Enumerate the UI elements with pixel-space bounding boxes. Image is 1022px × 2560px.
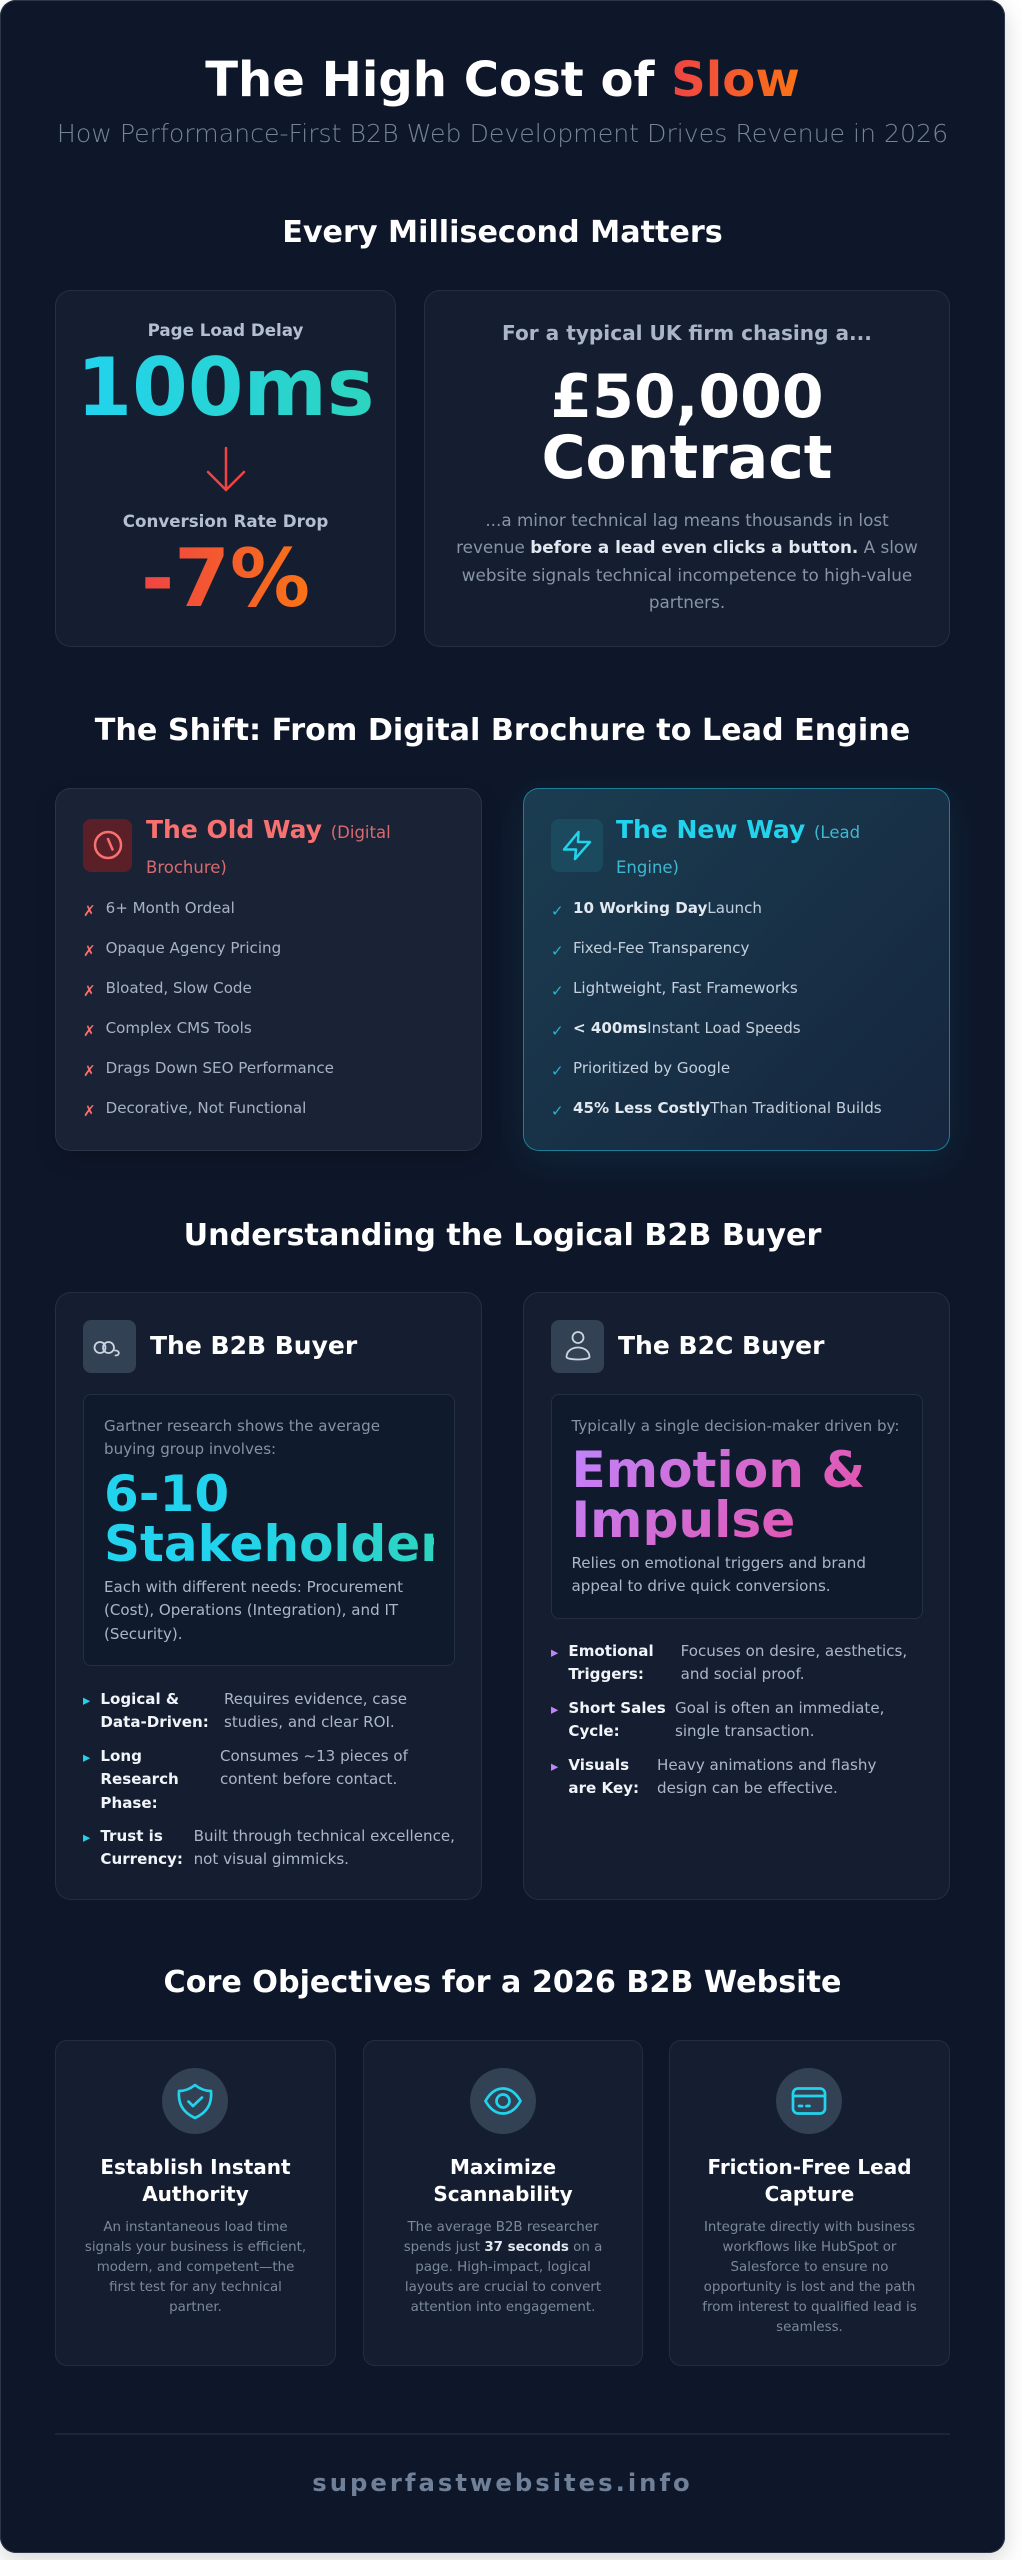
panel: friction-free lead capture: [669, 2040, 950, 2366]
heading: core objectives: Core Objectives for a 2026 B2B Website: [164, 1965, 841, 2000]
panel: contract explanation: [424, 290, 950, 647]
list: old way drawbacks: 6+ Month Ordeal: [106, 898, 235, 916]
icon: lightning bolt: [551, 819, 603, 872]
point: long research phase: ▸: [83, 1750, 90, 1766]
panel: the B2C buyer: [523, 1292, 950, 1900]
intro text: [104, 1417, 380, 1458]
card text: seamless.: [776, 2320, 843, 2335]
point: emotional triggers: ▸: [551, 1645, 558, 1661]
point: emotional triggers: Focuses on desire, aesthetics,: [681, 1642, 907, 1660]
icon: shield: [162, 2068, 228, 2134]
point: short sales cycle: Goal is often an immediate,: [675, 1699, 884, 1717]
icon: eye: [470, 2068, 536, 2134]
icon: card: [776, 2068, 842, 2134]
stat box: stakeholders: [83, 1394, 455, 1666]
point: visuals are key: design can be effective.: [657, 1779, 838, 1797]
stat box: emotion and impulse: [551, 1394, 923, 1619]
stat: contract value: [542, 362, 832, 493]
card text: spends just 37 seconds on a: [404, 2240, 602, 2255]
list: old way drawbacks: ✗: [83, 1062, 96, 1080]
list: old way drawbacks: ✗: [83, 982, 96, 1000]
point: emotional triggers: [551, 1642, 907, 1683]
supporting text: Each with different needs: Procurement: [104, 1578, 403, 1596]
explanation text: revenue before a lead even clicks a button. A slow: [456, 537, 918, 557]
point: long research phase: Long: [100, 1747, 142, 1765]
list: old way drawbacks: ✗: [83, 942, 96, 960]
card title: [433, 2154, 573, 2206]
stat: emotion and impulse: Impulse: [572, 1490, 795, 1549]
panel: establish instant authority: [55, 2040, 336, 2366]
point: short sales cycle: ▸: [551, 1702, 558, 1718]
list: old way drawbacks: Drags Down SEO Performance: [106, 1059, 334, 1077]
point: short sales cycle: single transaction.: [675, 1722, 815, 1740]
list: new way benefits: Prioritized by Google: [573, 1059, 730, 1077]
card text: modern, and competent—the: [97, 2260, 294, 2275]
point: logical and data-driven: [83, 1690, 407, 1731]
panel: page load stats: [55, 290, 396, 647]
list: new way benefits: Fixed-Fee Transparency: [573, 939, 749, 957]
panel title: The Old Way (Digital: [146, 815, 391, 844]
point: trust is currency: ▸: [83, 1830, 90, 1846]
supporting text: [104, 1578, 403, 1643]
card text: Integrate directly with business: [704, 2220, 915, 2235]
point: short sales cycle: Short Sales: [568, 1699, 666, 1717]
lead-in text: For a typical UK firm chasing a...: [502, 321, 872, 345]
heading: every millisecond matters: Every Millisecond Matters: [282, 215, 723, 250]
explanation text: website signals technical incompetence to high-value: [462, 565, 912, 585]
card text: workflows like HubSpot or: [723, 2240, 896, 2255]
panel title: The B2C Buyer: [618, 1331, 824, 1360]
card text: from interest to qualified lead is: [702, 2300, 917, 2315]
stat: emotion and impulse: [572, 1445, 902, 1545]
icon: group: [83, 1320, 136, 1373]
point: logical and data-driven: Logical &: [100, 1690, 179, 1708]
card text: The average B2B researcher: [407, 2220, 599, 2235]
heading: the shift: The Shift: From Digital Brochure to Lead Engine: [95, 713, 910, 748]
stat: emotion and impulse: Emotion &: [572, 1440, 865, 1499]
point: visuals are key: Heavy animations and flashy: [657, 1756, 876, 1774]
subtitle: How Performance-First B2B Web Development Drives Revenue in 2026: [57, 119, 948, 148]
point: short sales cycle: [551, 1699, 884, 1740]
list: new way benefits: ✓: [551, 1102, 564, 1120]
stat: 6-10 stakeholders: Stakeholders: [104, 1515, 475, 1573]
list: old way drawbacks: Complex CMS Tools: [106, 1019, 252, 1037]
icon: person: [551, 1320, 604, 1373]
card title: Establish Instant: [100, 2154, 291, 2178]
point: visuals are key: are Key:: [568, 1779, 639, 1797]
point: long research phase: Phase:: [100, 1794, 158, 1812]
icon: clock: [83, 819, 132, 872]
list: old way drawbacks: Decorative, Not Functional: [106, 1099, 306, 1117]
point: long research phase: Consumes ~13 pieces of: [220, 1747, 408, 1765]
card text: first test for any technical: [109, 2280, 282, 2295]
list: old way drawbacks: Bloated, Slow Code: [106, 979, 252, 997]
stat: 100ms: 100ms: [77, 341, 374, 434]
list: new way benefits: ✓: [551, 1062, 564, 1080]
card text: [702, 2220, 917, 2335]
label: page load delay: Page Load Delay: [148, 320, 303, 340]
point: logical and data-driven: ▸: [83, 1693, 90, 1709]
point: trust is currency: Trust is: [100, 1827, 163, 1845]
footer: website: superfastwebsites.info: [312, 2468, 693, 2497]
card text: Salesforce to ensure no: [731, 2260, 888, 2275]
intro text: buying group involves:: [104, 1440, 276, 1458]
panel: the new way: [523, 788, 950, 1151]
card text: [85, 2220, 306, 2315]
stat: 6-10 stakeholders: [104, 1469, 434, 1569]
panel: the old way: [55, 788, 482, 1151]
intro text: Gartner research shows the average: [104, 1417, 380, 1435]
card text: layouts are crucial to convert: [405, 2280, 601, 2295]
list: new way benefits: 45% Less CostlyThan Traditional Builds: [573, 1099, 882, 1117]
point: trust is currency: Currency:: [100, 1850, 183, 1868]
list: new way benefits: Lightweight, Fast Frameworks: [573, 979, 798, 997]
point: visuals are key: ▸: [551, 1759, 558, 1775]
supporting text: (Security).: [104, 1625, 183, 1643]
point: logical and data-driven: Data-Driven:: [100, 1713, 209, 1731]
title: The High Cost of: [205, 52, 654, 108]
list: old way drawbacks: Opaque Agency Pricing: [106, 939, 281, 957]
card title: Authority: [142, 2182, 249, 2206]
card text: page. High-impact, logical: [415, 2260, 591, 2275]
stat: -7%: -7%: [141, 532, 310, 625]
card title: [707, 2154, 912, 2206]
point: visuals are key: Visuals: [568, 1756, 629, 1774]
point: emotional triggers: and social proof.: [681, 1665, 805, 1683]
list: old way drawbacks: ✗: [83, 902, 96, 920]
panel title: The B2B Buyer: [150, 1331, 357, 1360]
point: emotional triggers: Triggers:: [568, 1665, 644, 1683]
panel title: Brochure): [146, 858, 227, 877]
list: new way benefits: ✓: [551, 942, 564, 960]
card title: Friction-Free Lead: [707, 2154, 912, 2178]
supporting text: appeal to drive quick conversions.: [572, 1577, 831, 1595]
card title: Maximize: [450, 2154, 556, 2178]
card text: partner.: [169, 2300, 222, 2315]
point: logical and data-driven: Requires evidence, case: [224, 1690, 407, 1708]
panel: maximize scannability: [363, 2040, 643, 2366]
icon: down arrow: [206, 446, 246, 492]
point: logical and data-driven: studies, and clear ROI.: [224, 1713, 395, 1731]
title: Slow: [671, 52, 800, 108]
panel title: [146, 815, 391, 877]
stat: 6-10 stakeholders: 6-10: [104, 1465, 229, 1523]
point: long research phase: content before contact.: [220, 1770, 397, 1788]
list: new way benefits: 10 Working DayLaunch: [573, 898, 762, 916]
list: new way benefits: [551, 898, 882, 1120]
supporting text: Relies on emotional triggers and brand: [572, 1554, 866, 1572]
point: trust is currency: [83, 1827, 455, 1868]
explanation text: partners.: [649, 592, 725, 612]
list: old way drawbacks: ✗: [83, 1022, 96, 1040]
point: short sales cycle: Cycle:: [568, 1722, 620, 1740]
supporting text: [572, 1554, 866, 1595]
list: new way benefits: ✓: [551, 902, 564, 920]
supporting text: (Cost), Operations (Integration), and IT: [104, 1601, 398, 1619]
list: new way benefits: ✓: [551, 982, 564, 1000]
panel: the B2B buyer: [55, 1292, 482, 1900]
explanation text: ...a minor technical lag means thousands in lost: [485, 510, 889, 530]
list: new way benefits: < 400msInstant Load Speeds: [573, 1019, 801, 1037]
intro text: Typically a single decision-maker driven by:: [572, 1417, 899, 1435]
card text: signals your business is efficient,: [85, 2240, 306, 2255]
card text: [404, 2220, 602, 2315]
label: conversion rate drop: Conversion Rate Drop: [123, 511, 328, 531]
card text: An instantaneous load time: [103, 2220, 288, 2235]
list: old way drawbacks: [83, 898, 334, 1120]
point: long research phase: Research: [100, 1770, 179, 1788]
point: trust is currency: Built through technical excellence,: [194, 1827, 455, 1845]
stat: contract value: Contract: [542, 423, 832, 493]
explanation text: [456, 510, 918, 612]
card title: [100, 2154, 291, 2206]
panel title: Engine): [616, 858, 679, 877]
heading: understanding the buyer: Understanding the Logical B2B Buyer: [184, 1218, 821, 1253]
point: visuals are key: [551, 1756, 876, 1797]
card title: Scannability: [433, 2182, 573, 2206]
list: old way drawbacks: ✗: [83, 1102, 96, 1120]
point: long research phase: [83, 1747, 408, 1812]
point: emotional triggers: Emotional: [568, 1642, 654, 1660]
card text: opportunity is lost and the path: [704, 2280, 915, 2295]
stat: contract value: £50,000: [550, 362, 824, 432]
panel title: [616, 815, 860, 877]
point: trust is currency: not visual gimmicks.: [194, 1850, 349, 1868]
card text: attention into engagement.: [411, 2300, 595, 2315]
panel title: The New Way (Lead: [616, 815, 860, 844]
card title: Capture: [765, 2182, 854, 2206]
list: new way benefits: ✓: [551, 1022, 564, 1040]
